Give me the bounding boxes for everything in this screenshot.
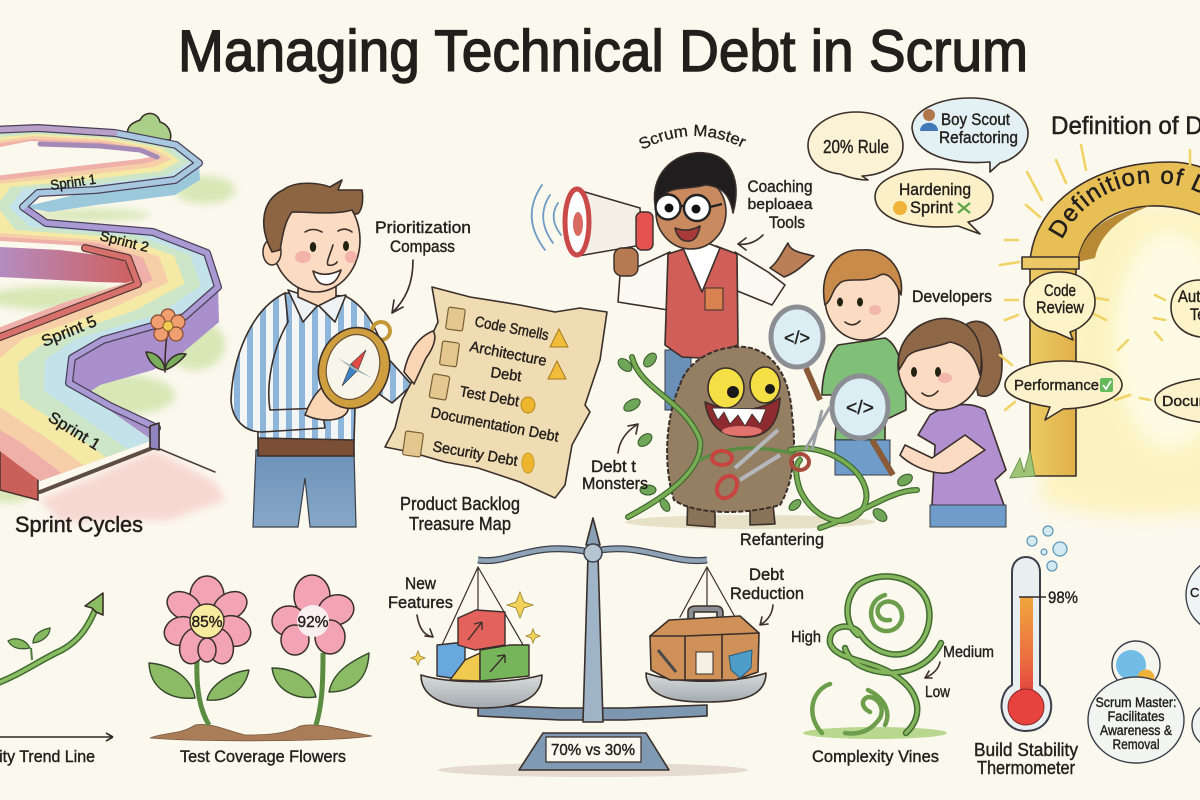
magnifier two: </> <box>846 398 874 419</box>
icon: warning <box>550 329 568 347</box>
panel: sprint cycles rainbow road <box>0 113 235 522</box>
icon: flower on wall <box>146 309 186 372</box>
right hand over map <box>404 331 435 384</box>
magnifier one <box>771 307 823 400</box>
monster mouth <box>705 398 780 437</box>
monster legs <box>687 495 775 527</box>
role text: Removal <box>1112 737 1160 752</box>
arrow: to monster <box>618 424 638 453</box>
label 85 percent: 85% <box>192 614 222 631</box>
title: Managing Technical Debt in Scrum <box>178 19 1028 84</box>
trend arrow inner <box>0 600 99 684</box>
speech bubble: hardening sprint: Sprint <box>910 198 953 217</box>
panel: sprint cycles rainbow road: Sprint 2 <box>98 227 151 255</box>
head <box>656 175 726 249</box>
label: Build Stability <box>974 740 1078 760</box>
ratio box <box>546 737 641 762</box>
bubble: automated tests <box>1171 280 1200 340</box>
bubble: code review: Code <box>1044 281 1076 300</box>
tick <box>1019 596 1046 598</box>
label: debt reduction: Reduction <box>730 584 804 603</box>
sparkles <box>411 592 540 665</box>
boy smile <box>845 321 860 325</box>
panel: test coverage flowers <box>149 575 372 766</box>
toolbox <box>650 606 759 680</box>
right pan <box>646 673 766 702</box>
scale beam inner <box>478 549 707 561</box>
label: debt monsters: Monsters <box>582 474 648 493</box>
bubble: documentation <box>1155 378 1200 425</box>
belt <box>258 437 354 456</box>
road surface bands <box>0 128 218 480</box>
speech bubble: 20% rule <box>808 112 903 180</box>
icon: megaphone <box>565 189 653 276</box>
boy shirt <box>822 338 906 440</box>
pivot <box>584 544 602 562</box>
glasses <box>656 194 722 221</box>
label: new features: New <box>405 574 437 593</box>
item: security debt: Security Debt <box>431 438 520 470</box>
label 92 percent: 92% <box>298 614 328 631</box>
wall end block <box>150 423 159 450</box>
right hand <box>770 243 814 277</box>
flower 85 percent <box>160 576 255 667</box>
boy pants <box>835 440 890 475</box>
monster pupils <box>727 384 775 398</box>
hair <box>264 180 363 252</box>
role text: Awareness & <box>1100 723 1172 738</box>
icon: compass <box>308 318 400 418</box>
item: code smells: Code Smells <box>473 313 550 344</box>
bulb <box>1008 689 1044 725</box>
grass <box>803 727 947 739</box>
label: product backlog treasure map: Product Backlog <box>400 494 520 514</box>
magnifier two <box>832 376 893 475</box>
center 92 percent <box>297 605 329 637</box>
label: new features <box>388 574 453 612</box>
heading: sprint cycles: Sprint Cycles <box>15 512 143 537</box>
label: debt reduction: Debt <box>749 565 784 584</box>
icon: coin <box>521 397 535 413</box>
role text <box>1096 695 1176 752</box>
speech bubble: hardening sprint: Hardening <box>899 180 971 199</box>
label: Test Coverage Flowers <box>180 747 346 766</box>
icon: coin <box>522 453 534 473</box>
icon: bush <box>127 113 171 140</box>
speech bubble: boy scout refactoring: Boy Scout <box>941 110 1010 129</box>
hair <box>654 153 736 213</box>
inner highlight <box>1115 230 1200 450</box>
monster eyes <box>708 367 780 408</box>
label: product backlog treasure map: Treasure Map <box>409 514 511 534</box>
girl shirt <box>918 405 1006 508</box>
vest <box>665 246 738 358</box>
bubble: performance <box>1005 361 1122 420</box>
item: architecture debt: Architecture <box>468 338 548 370</box>
monster teeth <box>712 408 766 426</box>
label: low: Low <box>925 684 950 701</box>
label: high: High <box>791 629 821 646</box>
item: test debt: Test Debt <box>458 383 521 410</box>
jeans <box>253 450 356 527</box>
road wall lips <box>0 128 218 492</box>
blush <box>869 305 952 383</box>
left pan <box>421 675 542 708</box>
panel: sprint cycles rainbow road: Sprint 1 <box>45 409 103 454</box>
girl hair <box>898 318 981 375</box>
pink ground shadow <box>40 450 225 522</box>
mouth <box>675 226 700 241</box>
item: documentation debt: Documentation Debt <box>429 404 561 446</box>
role text: Facilitates <box>1108 709 1165 724</box>
finial <box>586 518 600 545</box>
avatar circle <box>1112 641 1160 689</box>
x axis arrow <box>0 733 113 741</box>
eyes <box>664 204 700 214</box>
panel: scrum master role bubble <box>1088 641 1184 763</box>
bubble: code review <box>1024 272 1095 340</box>
vest pocket <box>705 288 723 310</box>
monster tongue <box>722 426 762 436</box>
scale beam <box>478 549 707 561</box>
ground shadow <box>625 515 875 529</box>
boy face <box>837 298 863 306</box>
item: debt word: Debt <box>489 364 523 385</box>
pole <box>583 555 603 722</box>
grass <box>1010 450 1035 478</box>
left chains <box>442 567 526 650</box>
label: prioritization compass <box>375 218 471 256</box>
panel: cropped role circle top: C <box>1190 585 1199 600</box>
sprint labels: Sprint 1 <box>49 171 97 193</box>
road walls <box>0 163 219 500</box>
boy head <box>825 256 899 340</box>
left arm <box>231 293 325 432</box>
inner spiral <box>871 595 902 631</box>
parchment <box>385 287 607 498</box>
arrow: to features <box>417 615 433 637</box>
panel: scrum master character <box>532 153 814 410</box>
girl jeans <box>930 505 1006 527</box>
soft glow <box>1040 205 1200 516</box>
label: debt monsters <box>582 457 648 493</box>
girl arm <box>900 435 985 473</box>
angry face <box>1138 670 1154 686</box>
panel: cropped role circle top <box>1186 557 1200 633</box>
monster body <box>667 347 794 512</box>
bubbles <box>1027 526 1067 571</box>
panel: build stability thermometer <box>974 526 1078 778</box>
mercury <box>1020 597 1033 697</box>
tube <box>1002 557 1051 731</box>
neck <box>298 283 336 306</box>
label: product backlog treasure map <box>400 494 520 534</box>
label: debt monsters: Debt t <box>591 457 636 476</box>
speech bubble: 20% rule: 20% Rule <box>823 137 889 157</box>
grass wash <box>0 176 235 503</box>
girl head <box>898 320 982 410</box>
scissors <box>712 407 830 502</box>
vine leaves <box>616 351 914 524</box>
pants <box>665 350 691 410</box>
panel: developers <box>771 250 1006 527</box>
label: coaching tools: Coaching <box>748 177 812 196</box>
bubble: code review: Review <box>1036 298 1085 317</box>
arrow head <box>85 593 103 615</box>
right sleeve <box>735 252 785 305</box>
panel: complexity vines <box>791 576 994 766</box>
label: developers: Developers <box>912 287 992 306</box>
magnifier one: </> <box>784 328 810 348</box>
label: medium: Medium <box>943 644 994 661</box>
boy hair <box>824 250 902 305</box>
bubble: performance: Performance <box>1014 377 1099 394</box>
speech bubble: boy scout refactoring <box>912 98 1028 172</box>
label: prioritization compass: Prioritization <box>375 218 471 237</box>
label: Complexity Vines <box>812 747 939 766</box>
collar <box>288 290 346 322</box>
base <box>519 733 669 770</box>
label: refactoring: Refantering <box>740 530 824 549</box>
label: debt reduction <box>730 565 804 603</box>
panel: debt monster with vines <box>616 347 917 529</box>
girl face <box>911 367 941 377</box>
value: 98% <box>1048 588 1078 607</box>
label: scrum master: Scrum Master <box>639 124 746 148</box>
collar <box>683 240 720 292</box>
left sleeve <box>618 252 670 310</box>
label: coaching tools <box>748 177 813 232</box>
face details <box>295 229 357 285</box>
lower strut <box>478 705 707 720</box>
speech bubble: hardening sprint <box>875 169 993 234</box>
arrow: to scrum master <box>738 235 763 250</box>
girl smile <box>922 391 938 396</box>
arrow: to compass <box>392 260 413 313</box>
capital <box>1022 257 1079 269</box>
vine inner <box>830 576 941 733</box>
label: new features: Features <box>388 593 453 612</box>
soil <box>150 724 372 741</box>
leaves <box>149 653 369 700</box>
lower swirl <box>812 684 887 733</box>
vines <box>628 357 917 528</box>
icon: warning <box>548 361 566 379</box>
panel: product owner character <box>231 180 412 527</box>
sound waves <box>532 185 561 250</box>
arch <box>1030 162 1200 262</box>
scroll icons <box>402 307 465 457</box>
left hand <box>305 378 348 420</box>
speech bubble: boy scout refactoring: Refactoring <box>939 128 1018 147</box>
head <box>272 188 360 292</box>
ear <box>263 239 281 265</box>
center 85 percent <box>190 604 224 638</box>
base shadow <box>438 763 748 777</box>
blue face <box>1116 650 1146 680</box>
panel: backlog treasure map <box>385 287 607 498</box>
shirt body and right sleeve <box>258 293 412 440</box>
feature blocks <box>437 610 529 681</box>
stems <box>197 653 323 725</box>
left pillar <box>1030 268 1076 476</box>
panel: balance scale <box>411 518 766 777</box>
panel: definition of done arch <box>998 144 1200 524</box>
label: prioritization compass: Compass <box>390 237 455 256</box>
inner arch shadow <box>1078 206 1150 262</box>
label: coaching tools: Tools <box>769 213 805 232</box>
ratio label: 70% vs 30% <box>551 742 635 759</box>
right chains <box>680 567 735 617</box>
arrow: to toolbox <box>760 605 773 625</box>
girl ponytail <box>965 321 1002 396</box>
role text: Scrum Master: <box>1096 695 1176 710</box>
label: coaching tools: beploaea <box>748 196 813 213</box>
panel: cropped role circle bottom <box>1192 697 1200 753</box>
panel: velocity trend line <box>0 593 113 766</box>
label line 2: Thermometer <box>977 758 1075 778</box>
role circle <box>1088 677 1184 763</box>
arrow: medium <box>925 662 940 678</box>
flower 92 percent <box>272 575 357 655</box>
sprout leaves <box>8 628 50 660</box>
trend arrow <box>0 600 99 684</box>
sun rays <box>1000 145 1190 410</box>
vine <box>830 576 941 733</box>
panel: sprint cycles rainbow road: Sprint 5 <box>39 313 99 351</box>
